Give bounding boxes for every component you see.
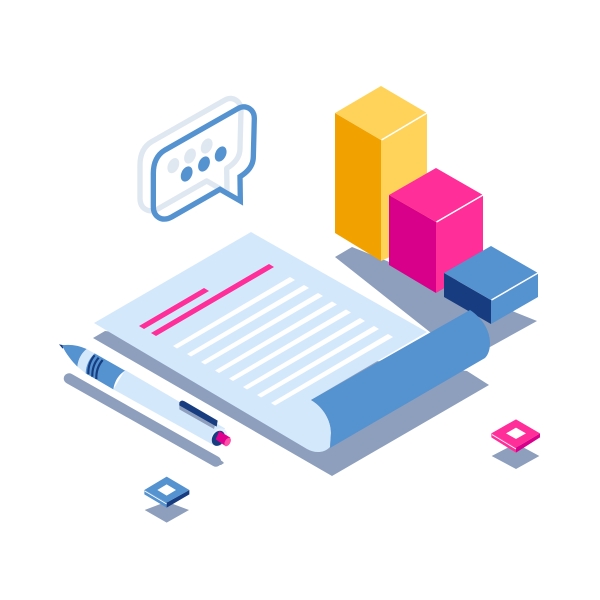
document: [94, 232, 490, 452]
yellow bar: [335, 86, 427, 261]
back bubble: [140, 99, 241, 211]
bar chart: [335, 86, 538, 324]
pen shadow: [69, 378, 224, 465]
pen end cap: [208, 425, 231, 449]
rolled paper edge: [311, 310, 490, 448]
pen nib: [59, 344, 65, 349]
blue bar: [444, 246, 538, 324]
speech bubble icon: [140, 99, 254, 219]
small blue tile: [144, 477, 189, 523]
front bubble: [153, 107, 254, 219]
paper sheet: [94, 232, 427, 452]
bar chart shadow: [335, 247, 537, 347]
pen grip: [86, 353, 125, 389]
pen body: [113, 370, 225, 445]
small pink tile: [491, 419, 540, 469]
grip rings: [88, 355, 103, 379]
pen: [59, 344, 232, 449]
text lines: [173, 277, 393, 406]
pink bar: [389, 168, 483, 293]
document shadow: [93, 331, 489, 476]
pen collar: [77, 349, 95, 373]
pink heading lines: [139, 264, 274, 336]
pen clip: [179, 404, 215, 429]
